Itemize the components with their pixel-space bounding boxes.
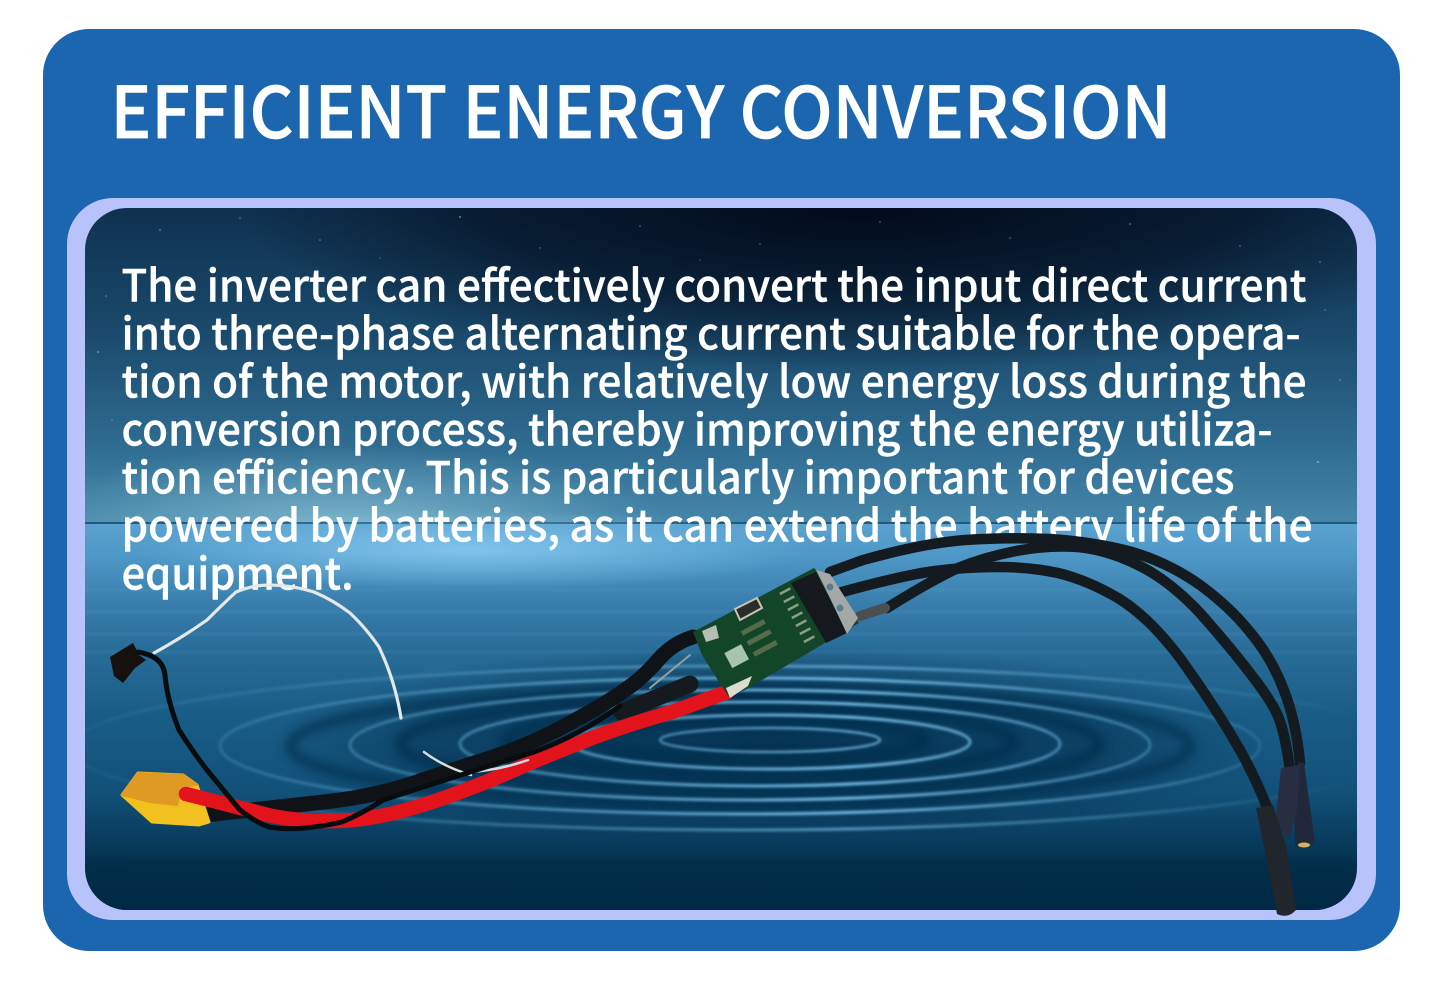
red power cable [186,692,727,821]
body text: tion efficiency. This is particularly important for devices [122,442,1234,506]
red and signal wiring [138,652,727,829]
panel: sea and night sky background [85,208,1357,910]
icon: yellow XT60 connector [122,773,209,825]
body text: powered by batteries, as it can extend the battery life of the [122,490,1312,554]
QR code [724,644,749,668]
body text: The inverter can effectively convert the input direct current [122,250,1306,314]
icon: small black connector [110,643,146,683]
water ripples [322,653,1218,822]
icon: motor bullet connectors [1256,762,1315,916]
body text: into three-phase alternating current suitable for the opera- [122,298,1300,362]
thin black signal wire [138,652,620,829]
black battery cable [205,637,693,815]
black motor cables [830,538,1300,807]
body text: tion of the motor, with relatively low energy loss during the [122,346,1306,410]
body text [122,250,1312,602]
power transistors [791,572,847,643]
white signal wire [154,585,401,718]
white scrap of wire [424,752,528,775]
solder tabs [816,570,858,634]
body text: equipment. [122,538,354,602]
stars [97,216,1341,463]
icon: circuit board [693,568,859,698]
inverter with cables [154,538,1300,815]
metal cable tip [860,608,885,616]
panel: lavender frame [67,198,1376,920]
component rows [779,587,815,643]
body text: conversion process, thereby improving the energy utiliza- [122,394,1272,458]
title: EFFICIENT ENERGY CONVERSION [110,57,1172,159]
